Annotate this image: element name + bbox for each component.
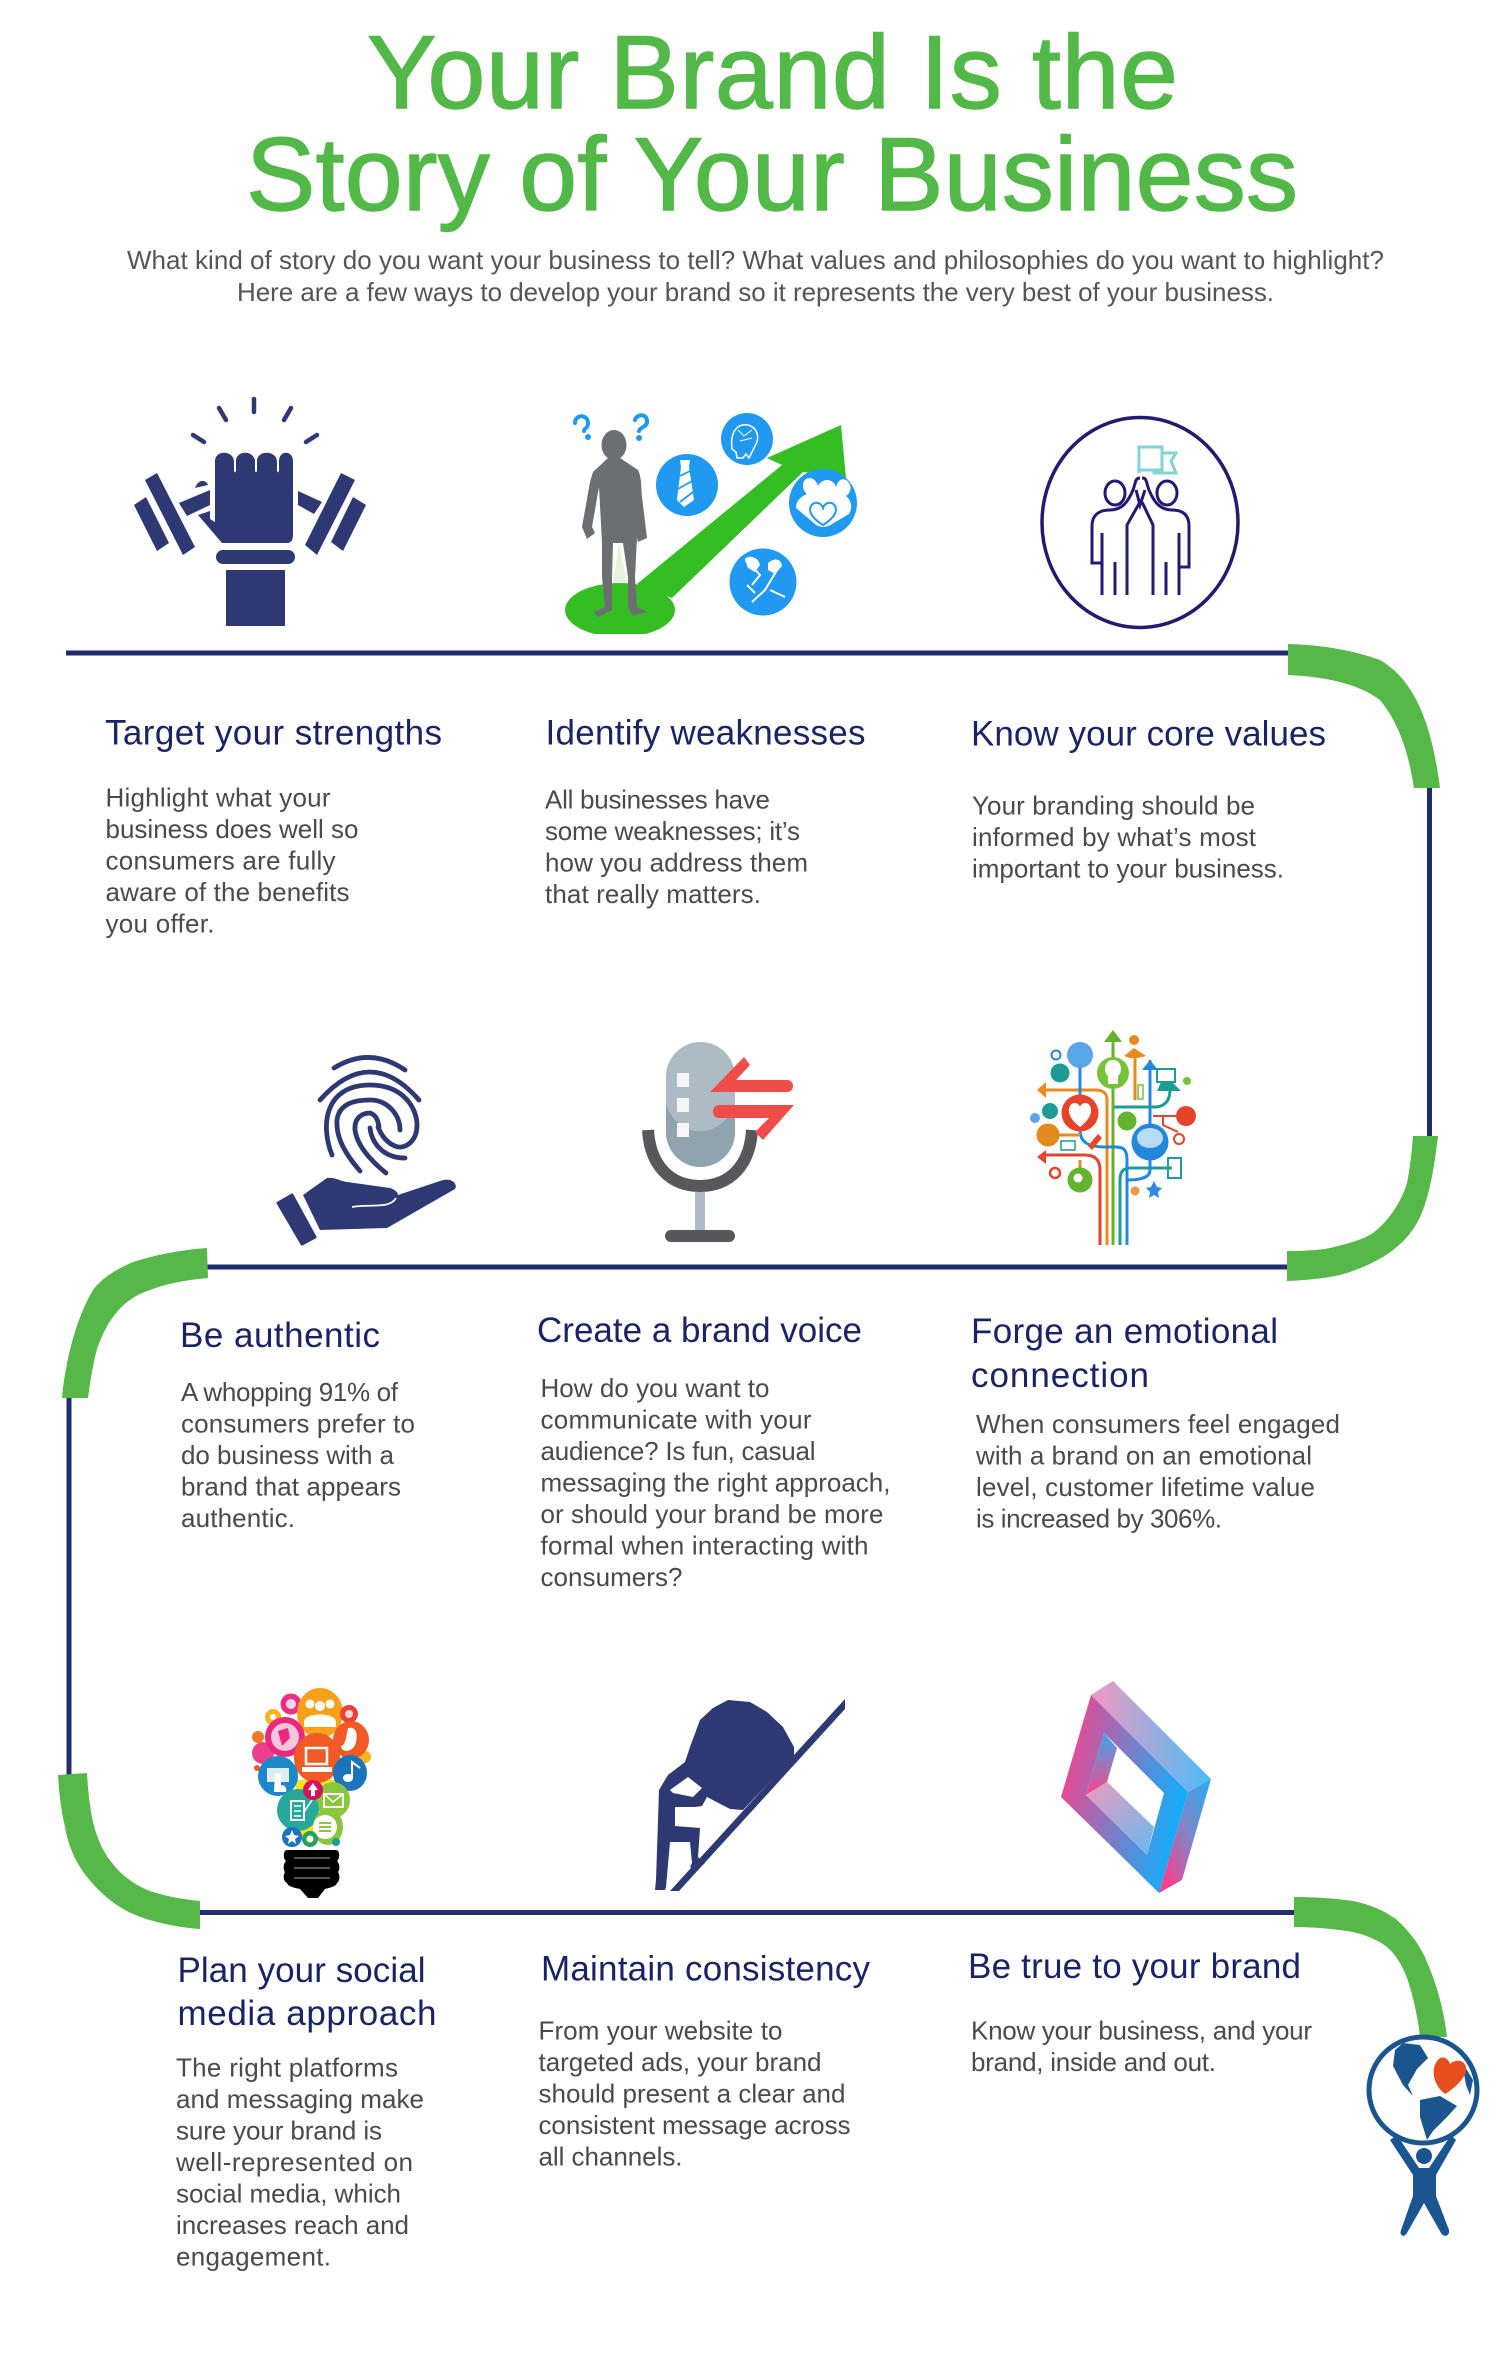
heading and text: be authentic: do business with a: [181, 1440, 395, 1470]
heading and text: forge an emotional connection: level, customer lifetime value: [976, 1472, 1315, 1502]
heading and text: know your core values: informed by what’s most: [972, 822, 1257, 852]
heading and text: plan your social media approach: and messaging make: [176, 2084, 424, 2114]
heading and text: create a brand voice: communicate with your: [540, 1404, 812, 1434]
heading and text: plan your social media approach: increases reach and: [176, 2210, 409, 2240]
heading and text: forge an emotional connection: Forge an emotional: [971, 1312, 1278, 1351]
intro text: Here are a few ways to develop your brand so it represents the very best of your business.: [237, 277, 1274, 307]
icon: colourful light bulb: [252, 1688, 371, 1898]
heading and text: create a brand voice: or should your brand be more: [540, 1499, 884, 1529]
heading and text: know your core values: Your branding should be: [972, 790, 1255, 820]
heading and text: be true to your brand: Know your business, and your: [971, 2016, 1312, 2046]
icon: fingerprint over hand: [278, 1057, 456, 1244]
heading and text: forge an emotional connection: with a brand on an emotional: [975, 1440, 1312, 1470]
heading and text: identify weaknesses: All businesses have: [545, 784, 770, 814]
heading and text: identify weaknesses: how you address them: [545, 848, 808, 878]
heading and text: be authentic: consumers prefer to: [181, 1408, 415, 1438]
heading and text: create a brand voice: Create a brand voice: [537, 1311, 862, 1350]
heading and text: target your strengths: consumers are fully: [106, 846, 336, 876]
icon: emotional tree: [1030, 1030, 1196, 1245]
heading and text: maintain consistency: From your website to: [538, 2016, 782, 2046]
heading and text: be authentic: [180, 1316, 415, 1533]
heading and text: be authentic: Be authentic: [180, 1316, 380, 1355]
heading and text: create a brand voice: How do you want to: [540, 1373, 770, 1403]
heading and text: know your core values: [971, 714, 1326, 884]
intro text: What kind of story do you want your business to tell? What values and philosophies do you want to highlight?: [127, 245, 1384, 275]
heading and text: create a brand voice: formal when interacting with: [540, 1530, 868, 1560]
path: green curved corners: [58, 644, 1447, 2037]
heading and text: identify weaknesses: Identify weaknesses: [546, 714, 866, 752]
heading and text: maintain consistency: [538, 1950, 870, 2172]
heading and text: be authentic: brand that appears: [181, 1472, 401, 1502]
heading and text: forge an emotional connection: When consumers feel engaged: [976, 1409, 1340, 1439]
heading and text: plan your social media approach: social media, which: [176, 2178, 401, 2208]
heading and text: plan your social media approach: well-represented on: [175, 2147, 413, 2177]
heading and text: maintain consistency: consistent message across: [538, 2110, 850, 2140]
heading and text: plan your social media approach: sure your brand is: [176, 2116, 382, 2146]
heading and text: create a brand voice: [537, 1311, 890, 1592]
icon: impossible rectangle: [1061, 1681, 1211, 1893]
heading and text: maintain consistency: targeted ads, your brand: [538, 2047, 822, 2077]
intro text: [127, 245, 1384, 307]
heading and text: target your strengths: aware of the benefits: [106, 877, 350, 907]
path: navy connector lines: [66, 650, 1432, 1915]
title: Story of Your Business: [246, 117, 1298, 233]
heading and text: identify weaknesses: that really matters.: [545, 879, 761, 909]
title: Your Brand Is the: [367, 15, 1178, 131]
heading and text: forge an emotional connection: is increased by 306%.: [976, 1504, 1222, 1534]
icon: person holding globe with heart: [1369, 2037, 1477, 2236]
heading and text: be authentic: authentic.: [181, 1503, 295, 1533]
title: [246, 15, 1298, 233]
heading and text: maintain consistency: should present a clear and: [538, 2078, 846, 2108]
heading and text: target your strengths: you offer.: [106, 908, 214, 938]
heading and text: know your core values: Know your core values: [971, 714, 1326, 754]
heading and text: plan your social media approach: engagement.: [176, 2242, 331, 2272]
heading and text: know your core values: important to your business.: [972, 854, 1284, 884]
icon: figure pushing boulder: [655, 1699, 845, 1891]
heading and text: target your strengths: business does well so: [106, 814, 358, 844]
icon: high five in circle: [1042, 418, 1238, 628]
heading and text: be authentic: A whopping 91% of: [181, 1377, 399, 1407]
heading and text: plan your social media approach: [175, 1951, 436, 2272]
heading and text: plan your social media approach: The right platforms: [176, 2052, 398, 2082]
heading and text: maintain consistency: all channels.: [538, 2142, 682, 2172]
heading and text: identify weaknesses: some weaknesses; it’s: [545, 816, 800, 846]
heading and text: be true to your brand: [968, 1947, 1312, 2077]
icon: microphone with arrows: [648, 1042, 794, 1242]
heading and text: plan your social media approach: media approach: [178, 1994, 436, 2033]
heading and text: create a brand voice: consumers?: [540, 1562, 682, 1592]
heading and text: forge an emotional connection: [971, 1312, 1340, 1534]
heading and text: identify weaknesses: [545, 714, 866, 909]
heading and text: target your strengths: [105, 714, 442, 938]
heading and text: target your strengths: Target your strengths: [105, 714, 442, 752]
heading and text: target your strengths: Highlight what your: [106, 782, 331, 812]
heading and text: create a brand voice: audience? Is fun, casual: [540, 1436, 816, 1466]
heading and text: plan your social media approach: Plan your social: [178, 1951, 426, 1990]
heading and text: maintain consistency: Maintain consistency: [541, 1950, 870, 1988]
heading and text: be true to your brand: Be true to your brand: [968, 1947, 1301, 1986]
icon: fist with dumbbell: [134, 399, 366, 626]
heading and text: create a brand voice: messaging the right approach,: [540, 1468, 890, 1498]
icon: person and growth arrow: [560, 413, 857, 644]
heading and text: be true to your brand: brand, inside and out.: [971, 2047, 1216, 2077]
heading and text: forge an emotional connection: connection: [971, 1356, 1149, 1395]
